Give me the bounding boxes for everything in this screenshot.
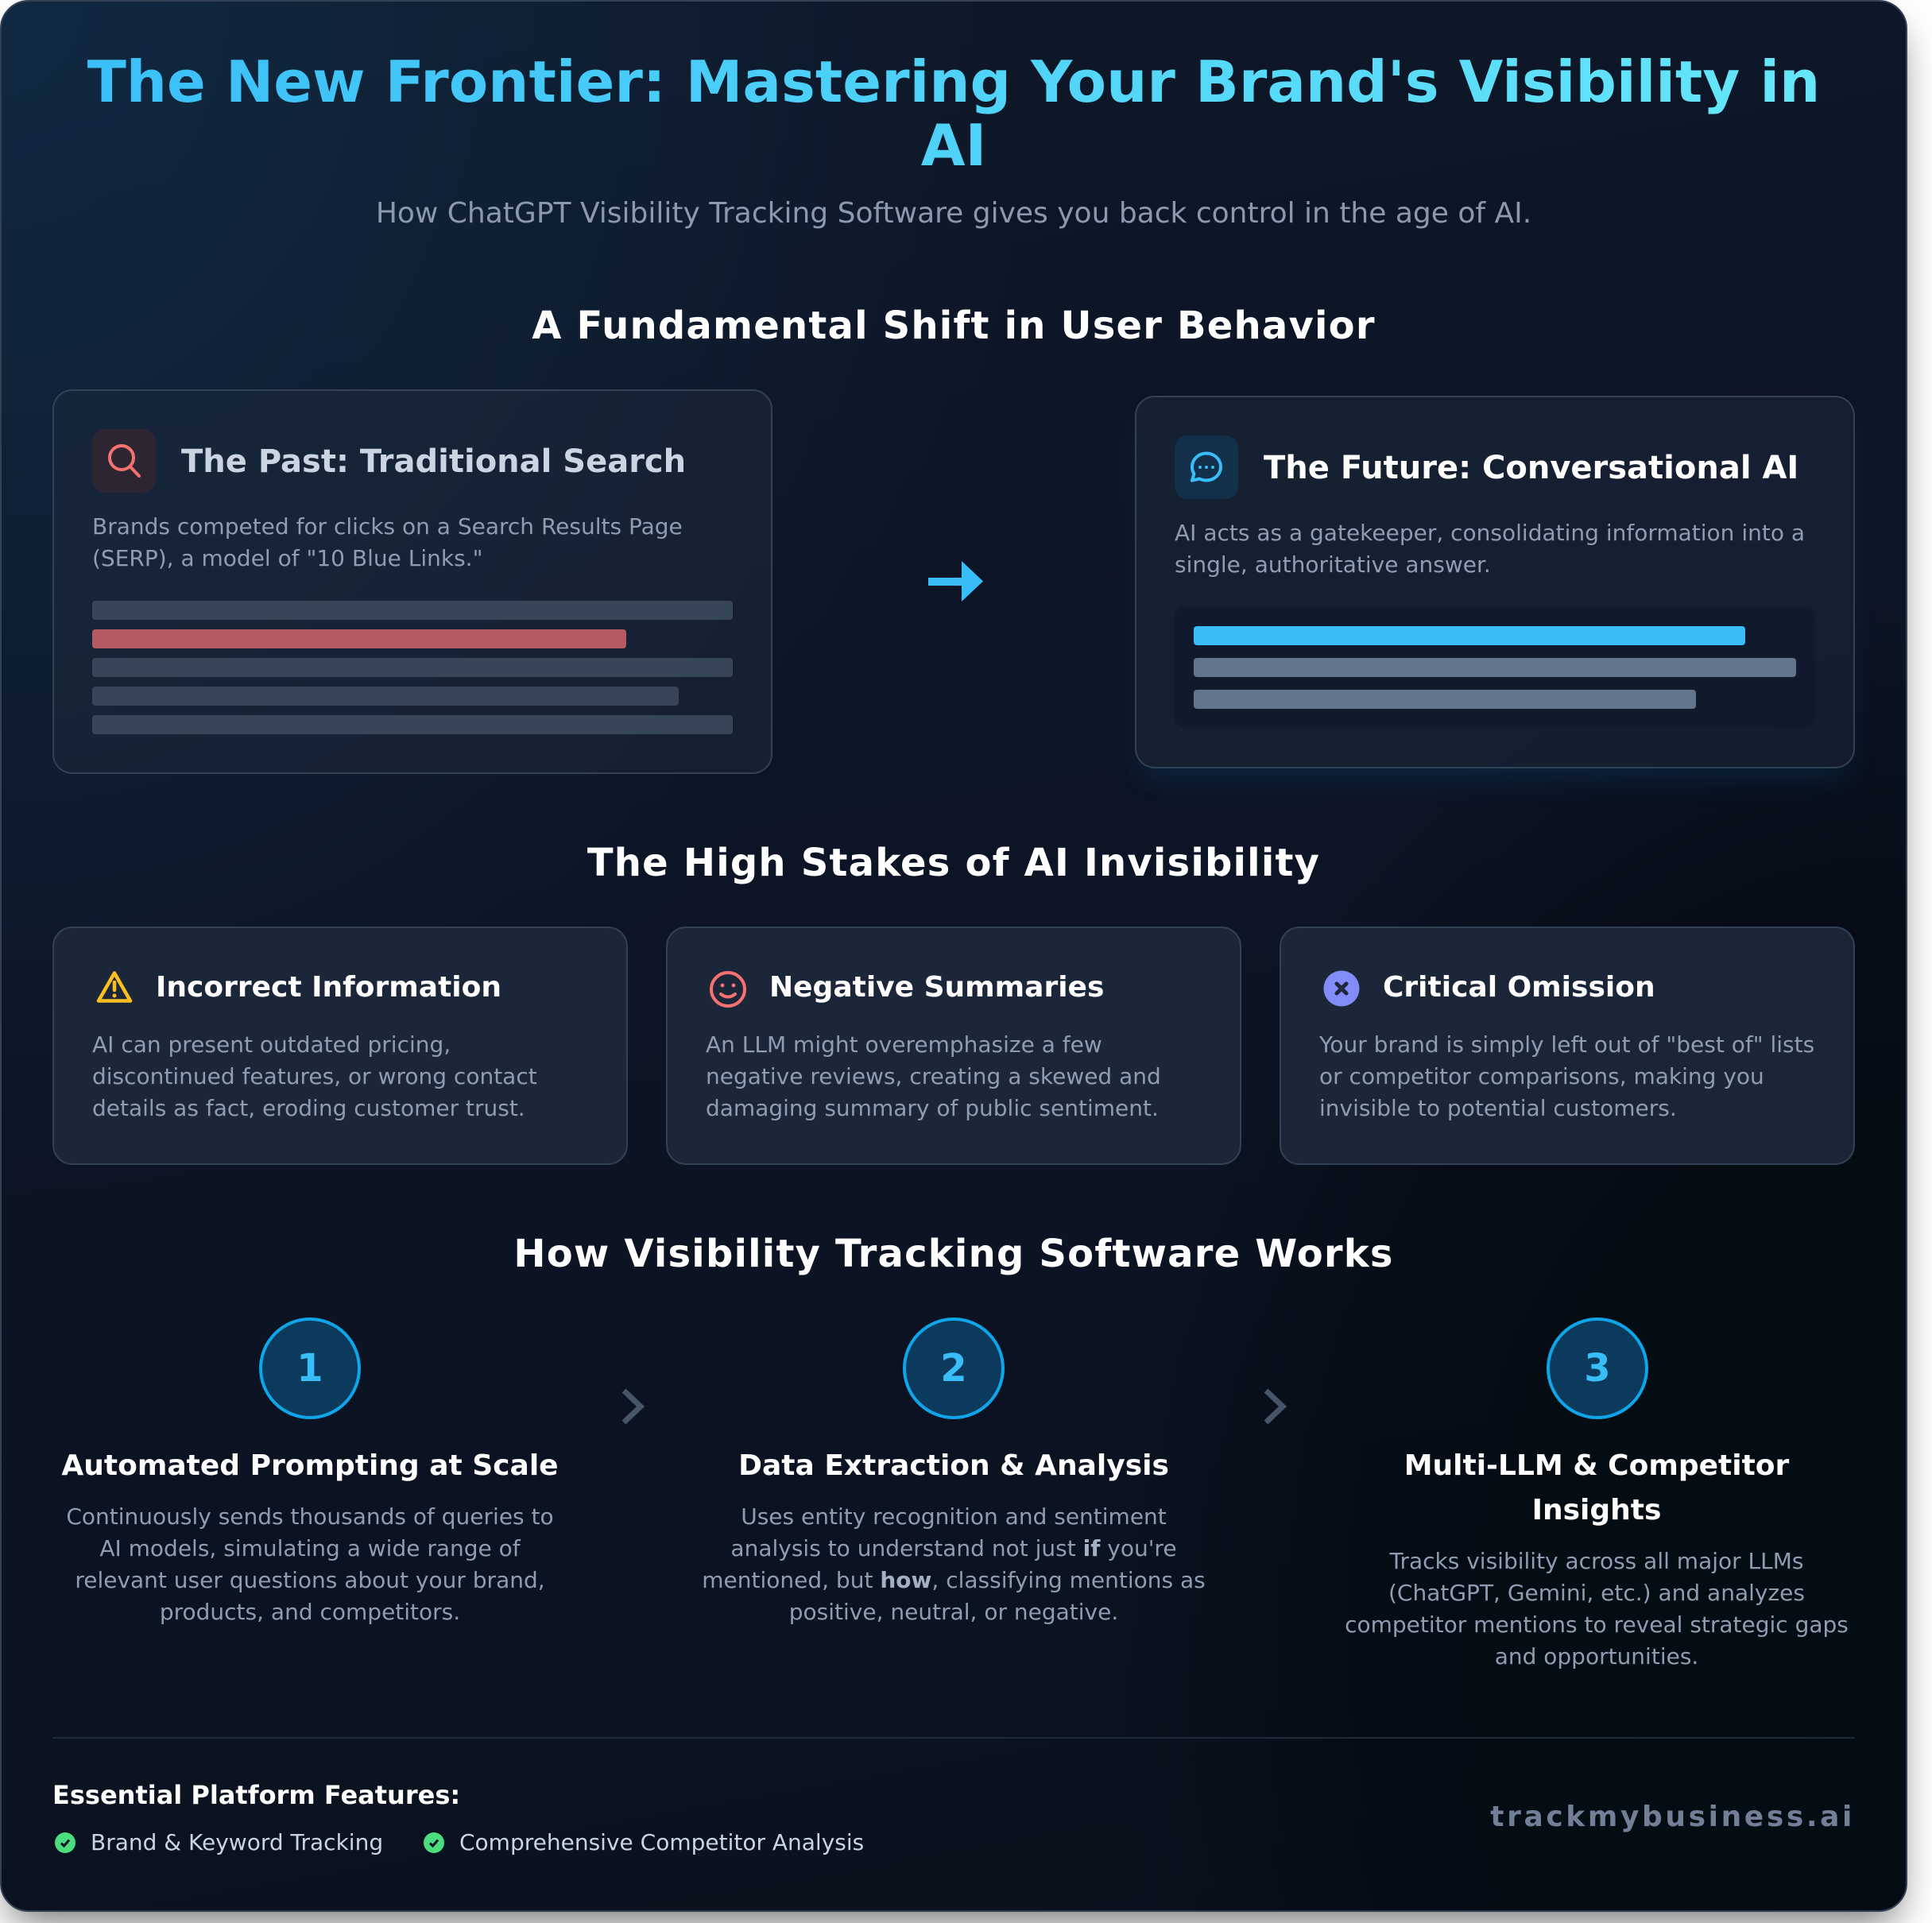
SERP illustration — [92, 601, 733, 734]
heading: high stakes: The High Stakes of AI Invisibility — [587, 841, 1320, 885]
arrow: past to future — [928, 561, 983, 602]
card text — [92, 1031, 537, 1121]
card heading: Critical Omission — [1383, 971, 1655, 1004]
step number 1 — [259, 1317, 361, 1419]
card text — [706, 1031, 1161, 1121]
icon: face — [710, 971, 746, 1008]
icon: chat bubble — [1175, 435, 1238, 499]
step 3 title — [1404, 1449, 1790, 1526]
past description: (SERP), a model of "10 Blue Links." — [92, 545, 482, 571]
future description — [1175, 520, 1805, 578]
step 2 text: analysis to understand not just if you're — [730, 1535, 1177, 1561]
step number 2: 2 — [940, 1346, 967, 1391]
step 1 text: Continuously sends thousands of queries to — [66, 1503, 554, 1530]
step 1 text: relevant user questions about your brand, — [75, 1567, 545, 1593]
card text — [1319, 1031, 1814, 1121]
card heading: Negative Summaries — [769, 971, 1104, 1004]
card text: or competitor comparisons, making you — [1319, 1063, 1764, 1089]
panel: negative summaries — [666, 927, 1241, 1165]
title: The New Frontier: Mastering Your Brand's Visibility in — [87, 48, 1820, 115]
card text: invisible to potential customers. — [1319, 1095, 1677, 1121]
chevron — [1264, 1389, 1287, 1424]
future description: AI acts as a gatekeeper, consolidating information into a — [1175, 520, 1805, 546]
panel: the future — [1135, 396, 1855, 768]
step 3 text: competitor mentions to reveal strategic gaps — [1345, 1612, 1849, 1638]
icon: warning triangle — [97, 971, 132, 1003]
future description: single, authoritative answer. — [1175, 551, 1491, 578]
step 1 title: Automated Prompting at Scale — [61, 1449, 559, 1482]
features heading: Essential Platform Features: — [52, 1780, 460, 1810]
step number 3 — [1547, 1317, 1648, 1419]
step number 3: 3 — [1584, 1346, 1611, 1391]
step 1 — [61, 1317, 559, 1625]
step 3 text: and opportunities. — [1495, 1643, 1698, 1670]
AI answer illustration — [1175, 607, 1815, 727]
future title: The Future: Conversational AI — [1264, 450, 1798, 486]
step 3 text: Tracks visibility across all major LLMs — [1389, 1548, 1804, 1574]
footer: platform features — [52, 1780, 864, 1855]
step 1 text: products, and competitors. — [160, 1599, 460, 1625]
title: AI — [921, 112, 986, 179]
panel: critical omission — [1280, 927, 1855, 1165]
step 2 text: Uses entity recognition and sentiment — [741, 1503, 1167, 1530]
brand name: trackmybusiness.ai — [1490, 1801, 1855, 1833]
title — [2, 50, 1906, 177]
past description: Brands competed for clicks on a Search Results Page — [92, 513, 683, 540]
step 1 text — [66, 1503, 554, 1625]
feature: brand tracking: Brand & Keyword Tracking — [91, 1829, 383, 1855]
card text: Your brand is simply left out of "best of" lists — [1319, 1031, 1814, 1058]
step 2 — [702, 1317, 1206, 1625]
step 3 title: Multi-LLM & Competitor — [1404, 1449, 1789, 1482]
heading: user behavior shift: A Fundamental Shift in User Behavior — [532, 304, 1376, 348]
card heading: Incorrect Information — [156, 971, 501, 1004]
step number 2 — [903, 1317, 1005, 1419]
feature: competitor analysis: Comprehensive Competitor Analysis — [459, 1829, 864, 1855]
card text: discontinued features, or wrong contact — [92, 1063, 537, 1089]
step number 1: 1 — [296, 1346, 323, 1391]
step 1 text: AI models, simulating a wide range of — [99, 1535, 521, 1561]
step 2 title: Data Extraction & Analysis — [738, 1449, 1169, 1482]
step 2 text: mentioned, but how, classifying mentions as — [702, 1567, 1206, 1593]
heading: how it works: How Visibility Tracking Software Works — [513, 1232, 1394, 1276]
step 3 — [1345, 1317, 1849, 1670]
card text: AI can present outdated pricing, — [92, 1031, 451, 1058]
panel: the past — [52, 389, 772, 774]
card text: damaging summary of public sentiment. — [706, 1095, 1159, 1121]
past title: The Past: Traditional Search — [181, 443, 686, 480]
step 2 text — [702, 1503, 1206, 1625]
card text: details as fact, eroding customer trust. — [92, 1095, 525, 1121]
step 3 text — [1345, 1548, 1849, 1670]
step 3 title: Insights — [1532, 1494, 1661, 1526]
panel: incorrect information — [52, 927, 628, 1165]
chevron — [621, 1389, 645, 1424]
icon: x circle — [1324, 971, 1359, 1006]
card text: negative reviews, creating a skewed and — [706, 1063, 1161, 1089]
icon: search — [92, 429, 156, 493]
subtitle: How ChatGPT Visibility Tracking Software gives you back control in the age of AI. — [376, 197, 1531, 230]
step 2 text: positive, neutral, or negative. — [789, 1599, 1118, 1625]
step 3 text: (ChatGPT, Gemini, etc.) and analyzes — [1388, 1580, 1805, 1606]
card text: An LLM might overemphasize a few — [706, 1031, 1102, 1058]
past description — [92, 513, 683, 571]
